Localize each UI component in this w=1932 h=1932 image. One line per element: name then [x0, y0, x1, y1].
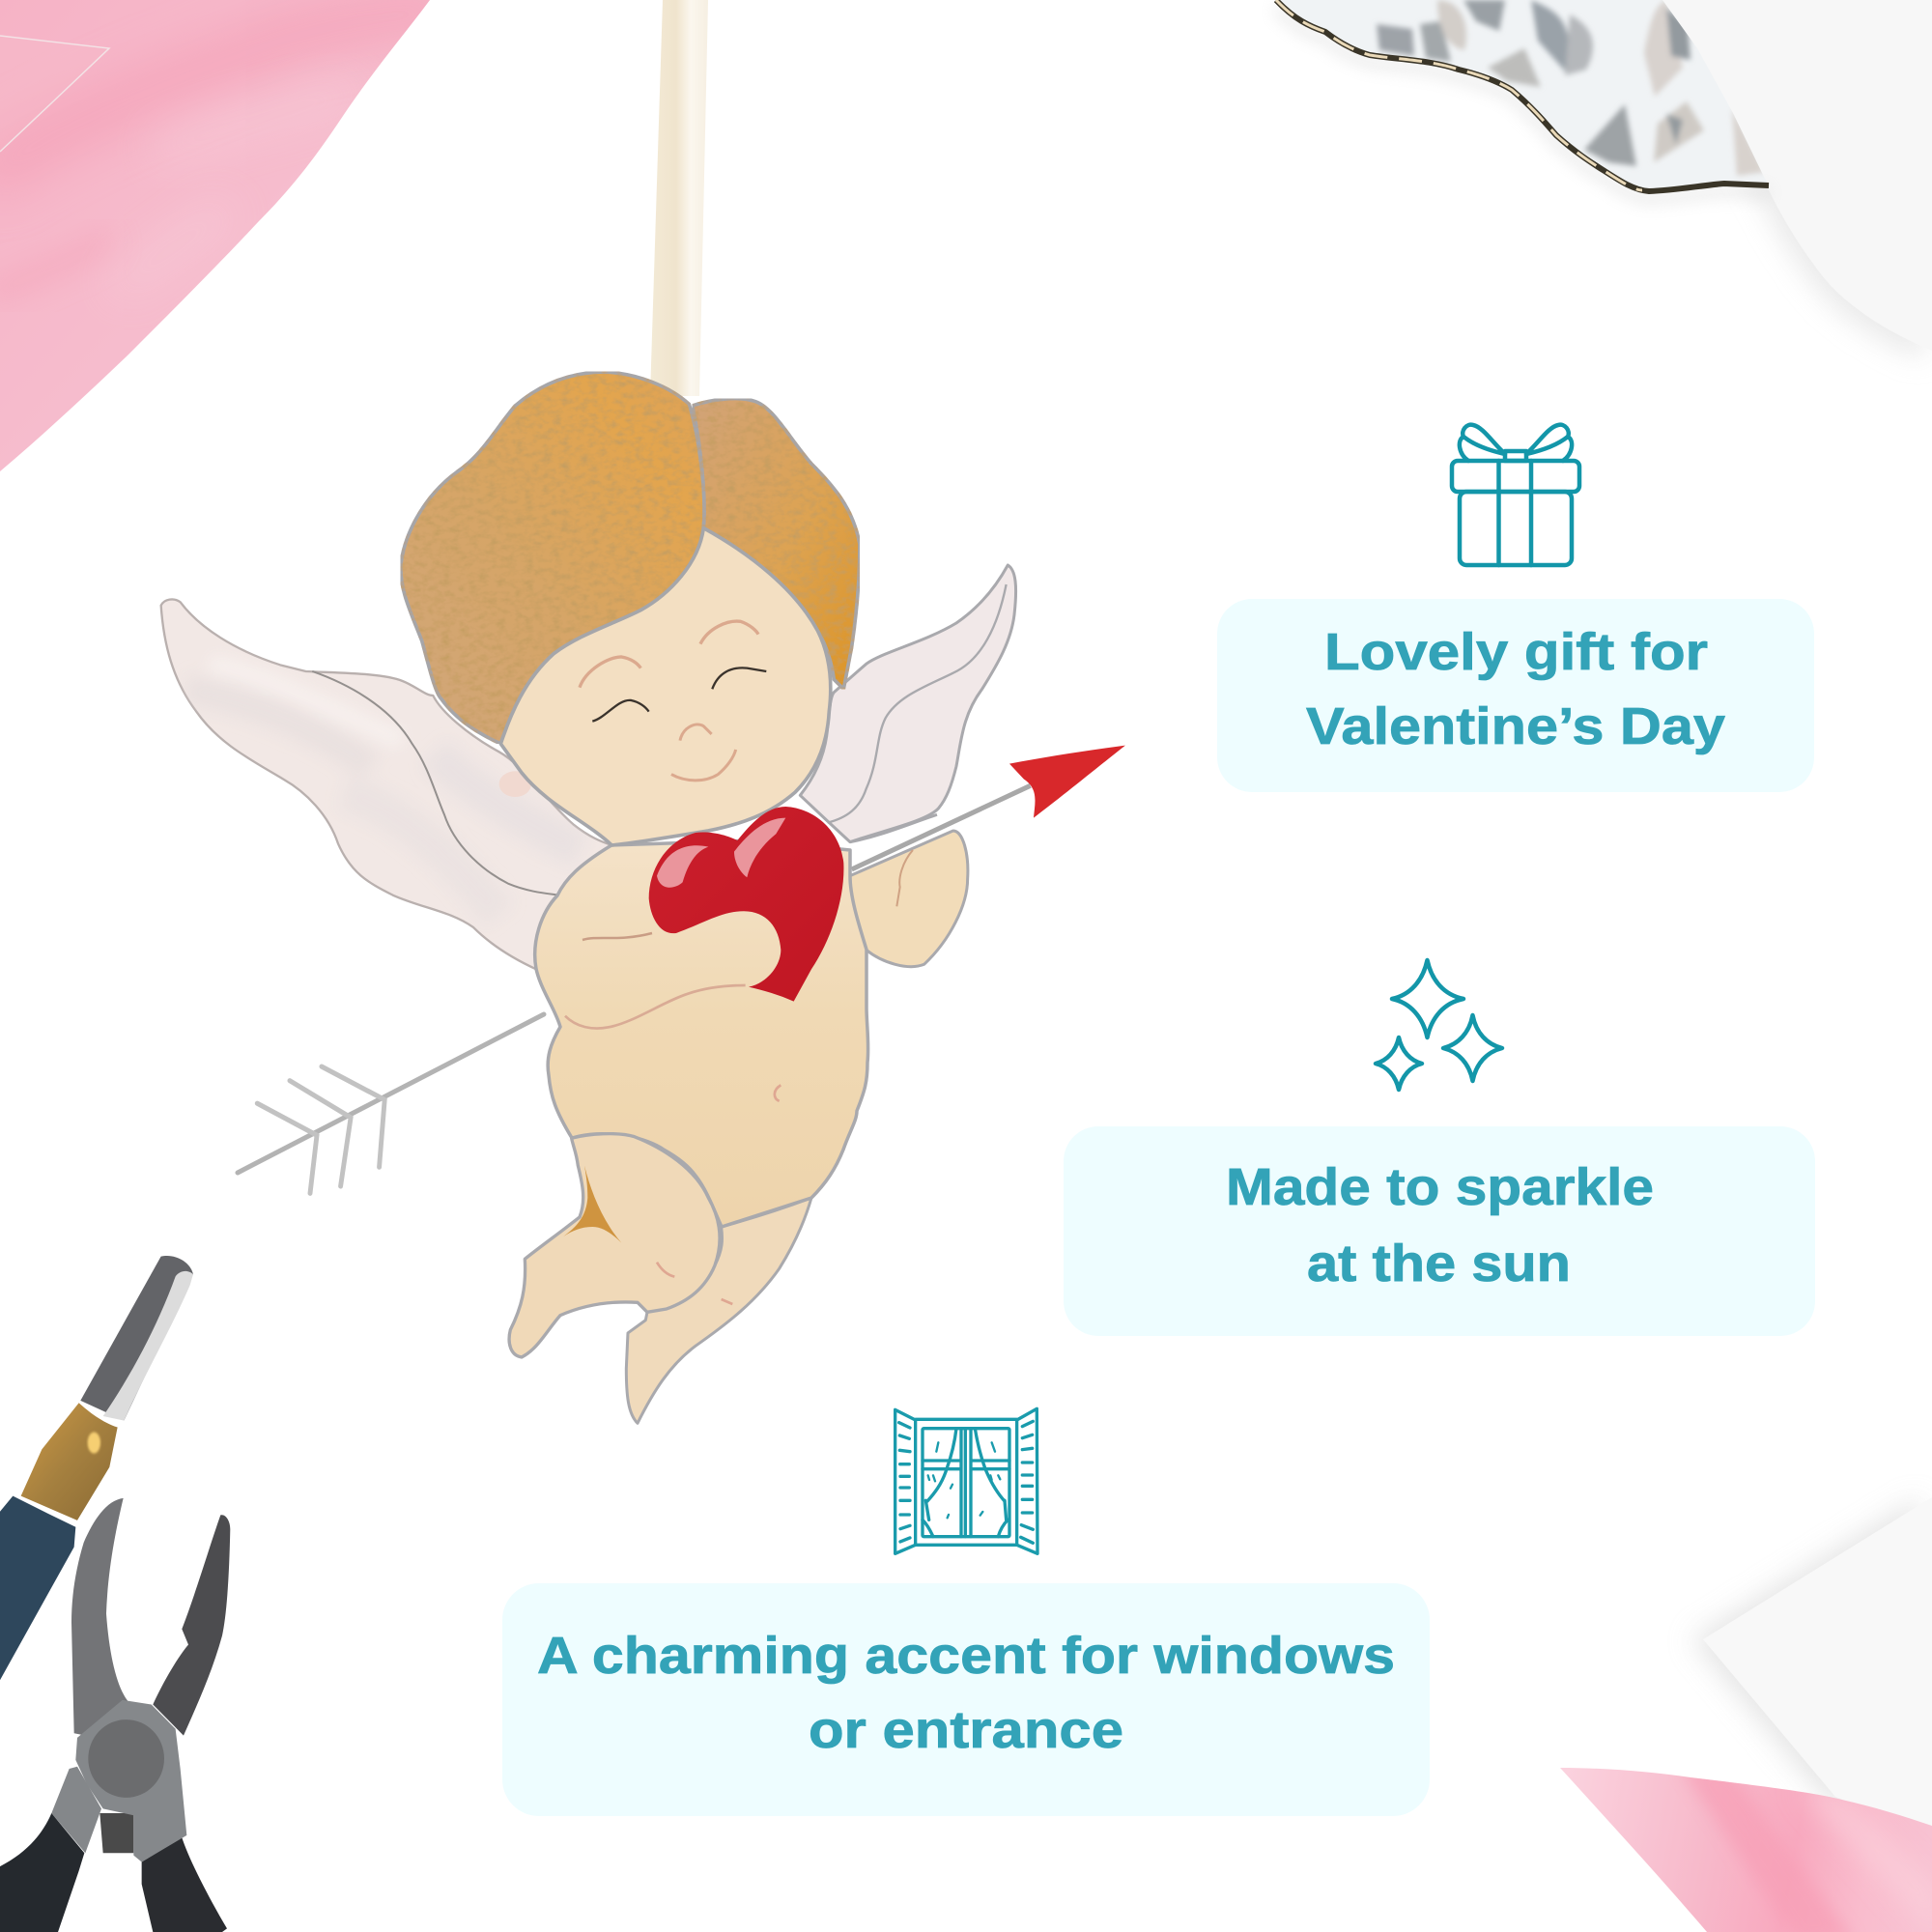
plier pivot body: [75, 1700, 186, 1861]
decoration: pink glass bottom-right: [1546, 1758, 1932, 1932]
panel: sparkle caption: [1064, 1126, 1815, 1336]
icon: gift: [1452, 425, 1579, 565]
ferrule highlight: [88, 1433, 100, 1454]
cutter blade: [80, 1256, 193, 1421]
product: stained glass cupid: [161, 0, 1125, 1423]
sparkle caption text: Made to sparkle: [1226, 1158, 1654, 1216]
sparkle caption text: [1226, 1158, 1654, 1293]
sparkle caption text: at the sun: [1307, 1235, 1571, 1293]
icon: window: [895, 1408, 1037, 1553]
plier left arm: [51, 1767, 101, 1853]
arrow shaft right: [852, 785, 1031, 869]
panel: window caption: [502, 1583, 1430, 1816]
right hand: [850, 831, 968, 967]
left arrow shaft: [238, 1014, 544, 1173]
arrow head: [1009, 746, 1125, 818]
cutter handle: [0, 1496, 75, 1680]
tool: glass cutter: [0, 1256, 193, 1680]
gift caption text: Valentine’s Day: [1306, 697, 1725, 755]
mouth: [671, 750, 736, 781]
hanging ribbon: [650, 0, 708, 396]
left leg: [509, 985, 781, 1357]
icon: sparkles: [1376, 960, 1502, 1090]
belly crease: [565, 985, 746, 1029]
window caption text: A charming accent for windows: [537, 1627, 1395, 1685]
hair left: [401, 372, 704, 744]
right plier jaw: [153, 1515, 230, 1736]
eye left: [592, 700, 649, 722]
decoration: white plate bottom-right with shadow: [1691, 1497, 1932, 1835]
decoration: textured clear glass top-right: [1256, 0, 1777, 203]
plier right handle: [142, 1837, 227, 1932]
hair right: [693, 399, 860, 689]
right leg: [626, 1198, 811, 1423]
body marks: [657, 1085, 781, 1304]
decoration: pink glass top-left: [0, 0, 454, 483]
body: [535, 840, 868, 1227]
face: [500, 528, 831, 845]
plier pivot: [88, 1719, 164, 1798]
right wing: [800, 565, 1125, 967]
arrow fletching: [257, 1066, 384, 1193]
arm crease: [582, 933, 652, 940]
eye right: [712, 668, 766, 689]
plier spring: [99, 1813, 133, 1853]
tool: pliers: [0, 1498, 230, 1932]
gift caption text: [1306, 623, 1725, 755]
left wing: [161, 599, 611, 969]
cutter ferrule: [21, 1403, 118, 1520]
hair and face: [401, 372, 860, 845]
hand crease: [896, 850, 913, 906]
nose: [680, 724, 712, 741]
eyebrow right: [700, 621, 758, 644]
panel: gift caption: [1217, 599, 1814, 792]
heart: [649, 807, 843, 1002]
leg shadow: [563, 1166, 621, 1243]
gift caption text: Lovely gift for: [1324, 623, 1708, 681]
plier left handle: [0, 1813, 84, 1932]
left plier jaw: [71, 1498, 128, 1738]
window caption text: [537, 1627, 1395, 1759]
decoration: white plate top-right with shadow: [1655, 0, 1932, 360]
window caption text: or entrance: [809, 1701, 1123, 1759]
eyebrow left: [580, 657, 640, 688]
cutter blade edge: [103, 1271, 193, 1421]
